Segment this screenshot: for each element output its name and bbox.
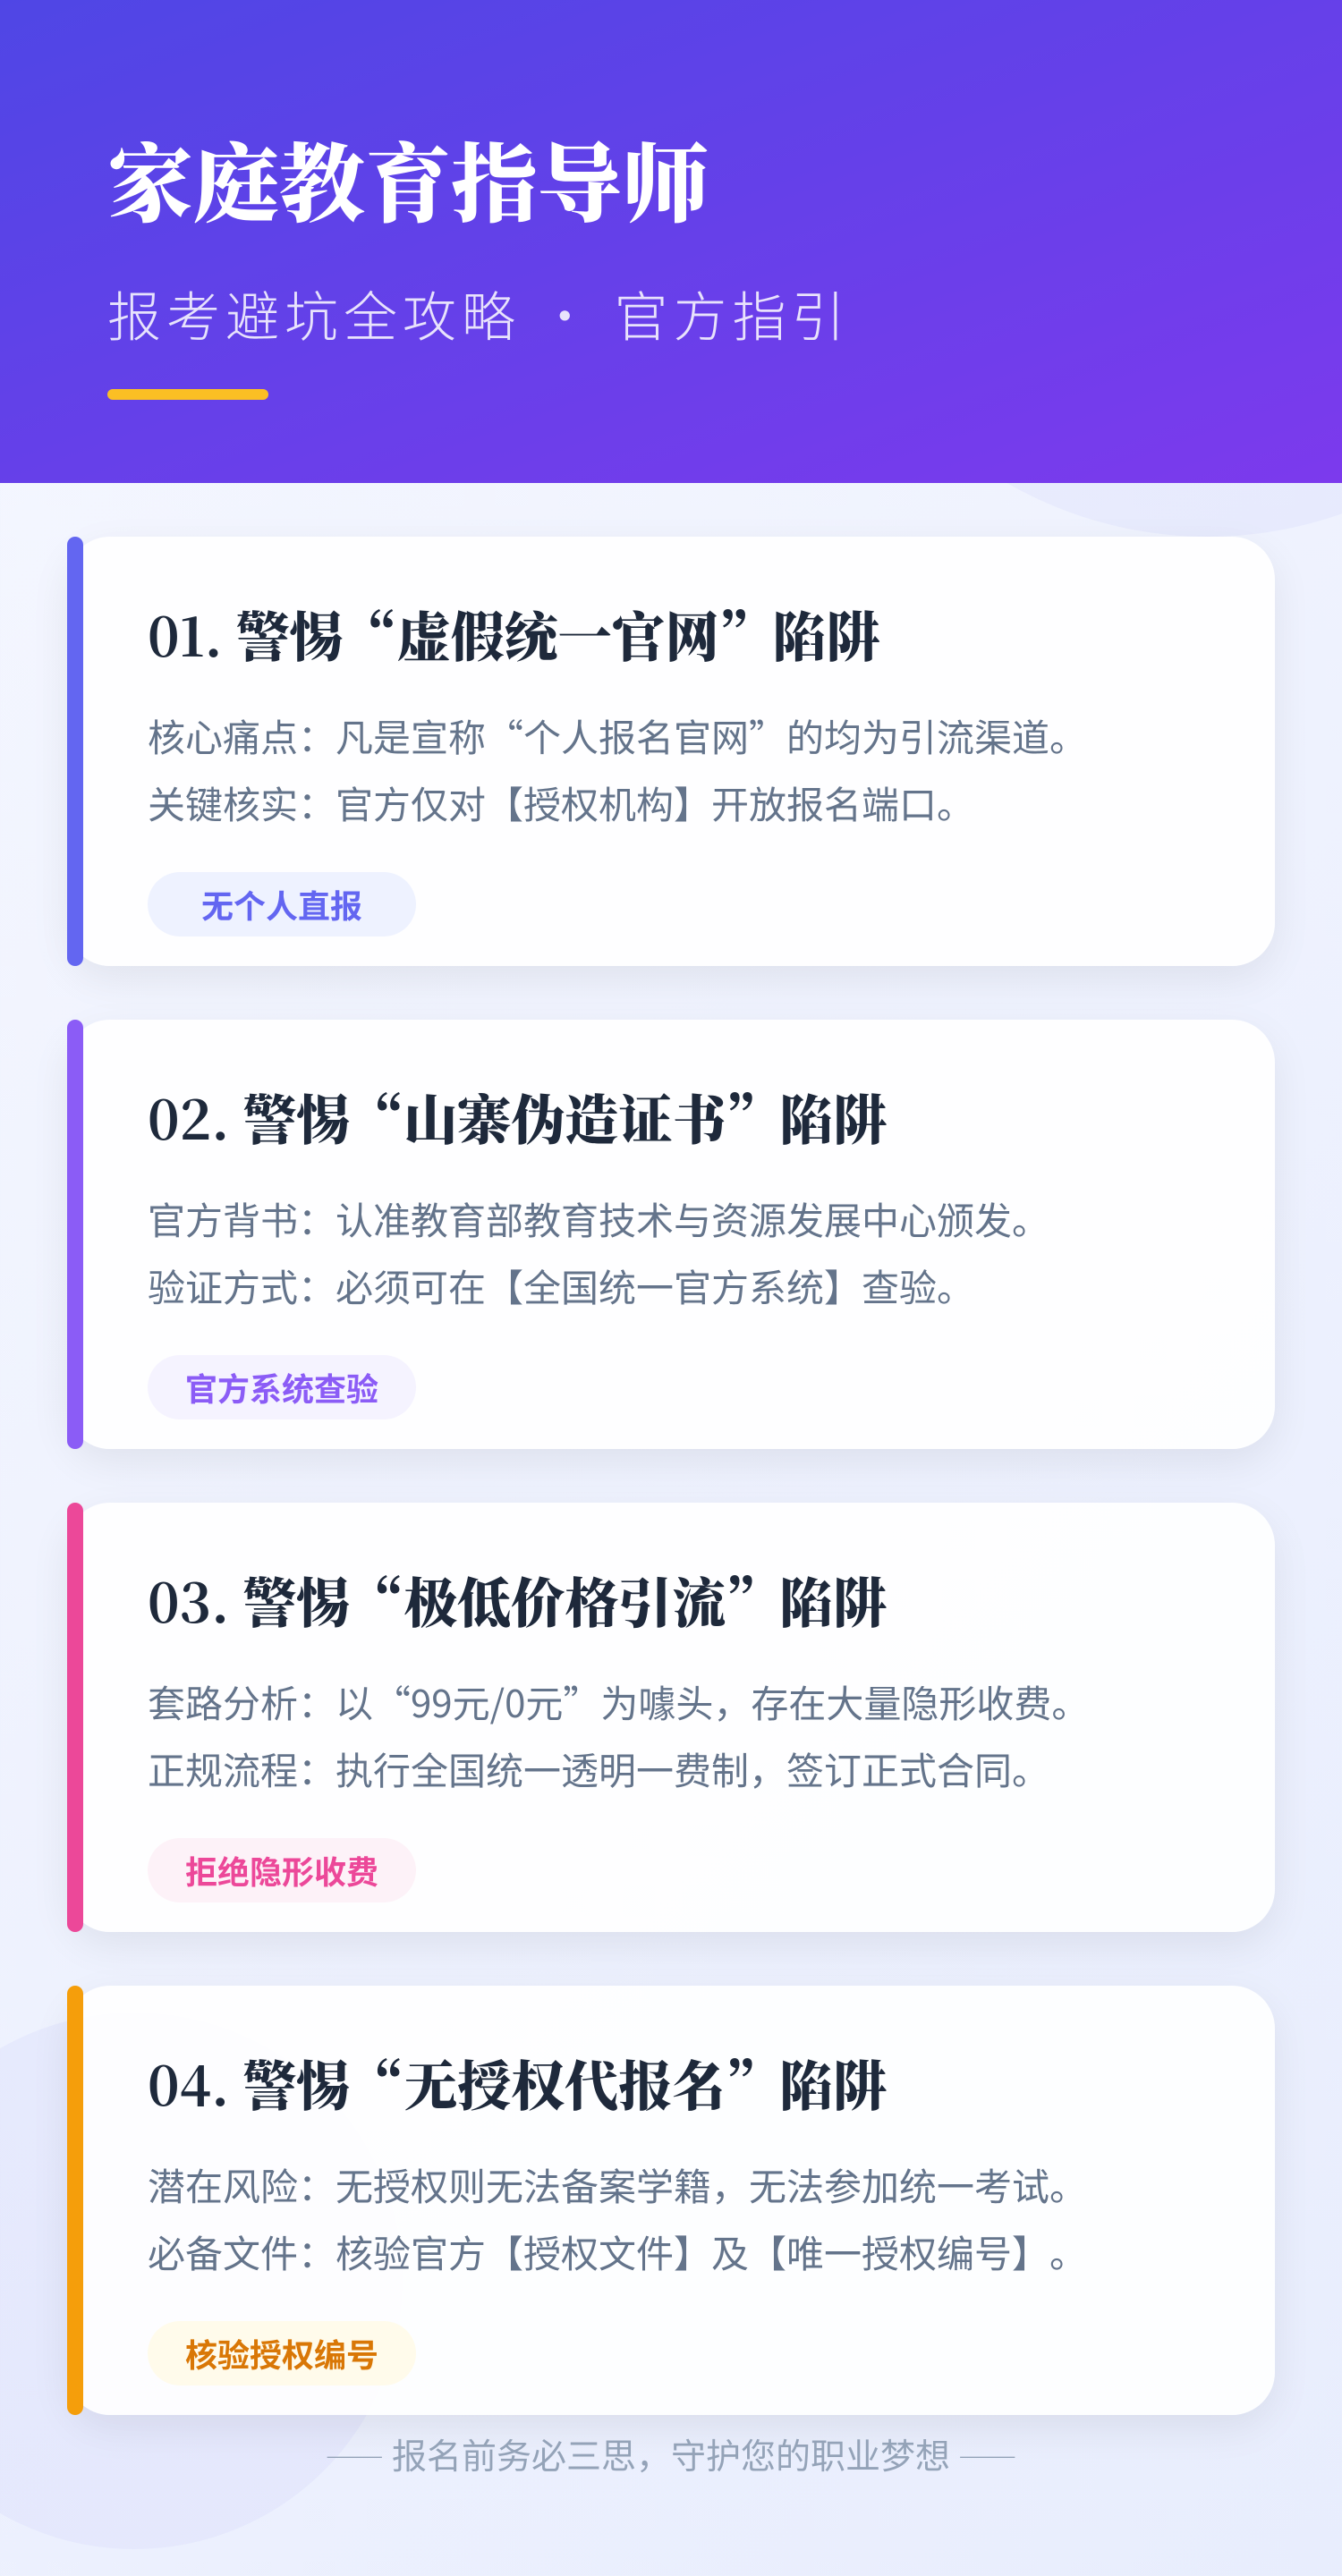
text line: 验证方式：必须可在【全国统一官方系统】查验。 — [148, 1258, 974, 1313]
card heading: 04. 警惕“无授权代报名”陷阱 — [148, 2045, 887, 2122]
tag — [148, 2321, 416, 2385]
tag: 官方系统查验 — [185, 1364, 378, 1411]
tag — [148, 1838, 416, 1902]
tag — [148, 1355, 416, 1419]
footer note: —— 报名前务必三思，守护您的职业梦想 —— — [325, 2429, 1017, 2479]
accent bar — [67, 1986, 83, 2415]
accent bar — [67, 1503, 83, 1932]
accent rule — [107, 389, 268, 400]
text line: 潜在风险：无授权则无法备案学籍，无法参加统一考试。 — [148, 2157, 1087, 2212]
text line: 官方背书：认准教育部教育技术与资源发展中心颁发。 — [148, 1191, 1049, 1246]
subtitle: 报考避坑全攻略 · 官方指引 — [107, 275, 851, 352]
decorative circle: top right — [805, 0, 1342, 537]
card heading: 03. 警惕“极低价格引流”陷阱 — [148, 1562, 887, 1639]
panel: card 02 — [67, 1020, 1275, 1449]
tag: 无个人直报 — [201, 881, 362, 928]
tag — [148, 872, 416, 936]
tag: 核验授权编号 — [185, 2330, 378, 2377]
accent bar — [67, 1020, 83, 1449]
card heading: 01. 警惕“虚假统一官网”陷阱 — [148, 596, 880, 673]
text line: 套路分析：以“99元/0元”为噱头，存在大量隐形收费。 — [148, 1674, 1089, 1729]
text line: 关键核实：官方仅对【授权机构】开放报名端口。 — [148, 775, 974, 830]
card heading: 02. 警惕“山寨伪造证书”陷阱 — [148, 1079, 887, 1156]
header banner — [0, 0, 1342, 483]
title: 家庭教育指导师 — [107, 117, 709, 240]
tag: 拒绝隐形收费 — [185, 1847, 378, 1894]
text line: 核心痛点：凡是宣称“个人报名官网”的均为引流渠道。 — [148, 708, 1087, 763]
text line: 正规流程：执行全国统一透明一费制，签订正式合同。 — [148, 1741, 1049, 1796]
panel: card 01 — [67, 537, 1275, 966]
panel: card 03 — [67, 1503, 1275, 1932]
panel: card 04 — [67, 1986, 1275, 2415]
decorative circle: bottom left — [0, 2012, 403, 2549]
accent bar — [67, 537, 83, 966]
text line: 必备文件：核验官方【授权文件】及【唯一授权编号】。 — [148, 2224, 1087, 2279]
